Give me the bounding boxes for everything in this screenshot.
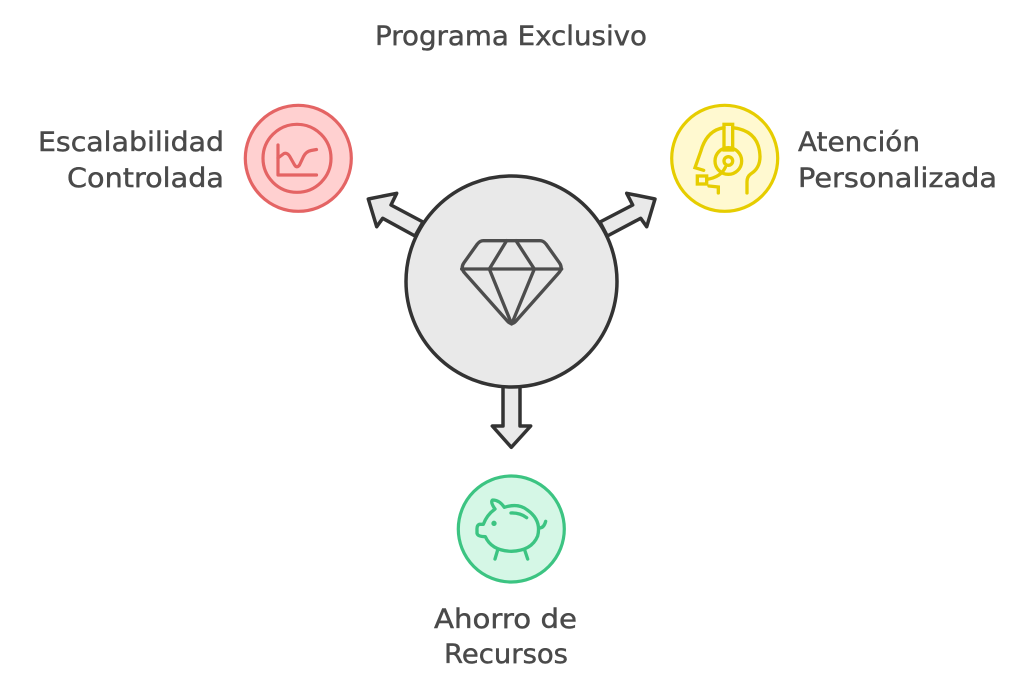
arrow: to Escalabilidad Controlada [368, 193, 423, 236]
central circle with diamond [406, 176, 617, 387]
label [434, 604, 577, 670]
panel: Ahorro de Recursos [434, 476, 577, 670]
icon: piggy bank [477, 500, 546, 559]
icon: diamond [462, 241, 562, 324]
label [38, 127, 224, 194]
icon: headset head [695, 124, 760, 193]
label: Recursos [444, 639, 568, 670]
label: Personalizada [798, 163, 997, 194]
panel: Atención Personalizada [672, 105, 997, 211]
arrow: to Ahorro de Recursos [492, 380, 531, 447]
red circle icon [245, 105, 351, 211]
label [798, 127, 997, 194]
panel: Escalabilidad Controlada [38, 105, 351, 211]
label: Ahorro de [434, 604, 577, 635]
green circle icon [458, 476, 564, 582]
arrow: to Atención Personalizada [600, 193, 655, 236]
title: Programa Exclusivo [375, 21, 647, 52]
label: Controlada [67, 163, 224, 194]
icon: line chart [278, 145, 316, 175]
yellow circle icon [672, 105, 778, 211]
label: Escalabilidad [38, 127, 224, 158]
label: Atención [798, 127, 920, 158]
